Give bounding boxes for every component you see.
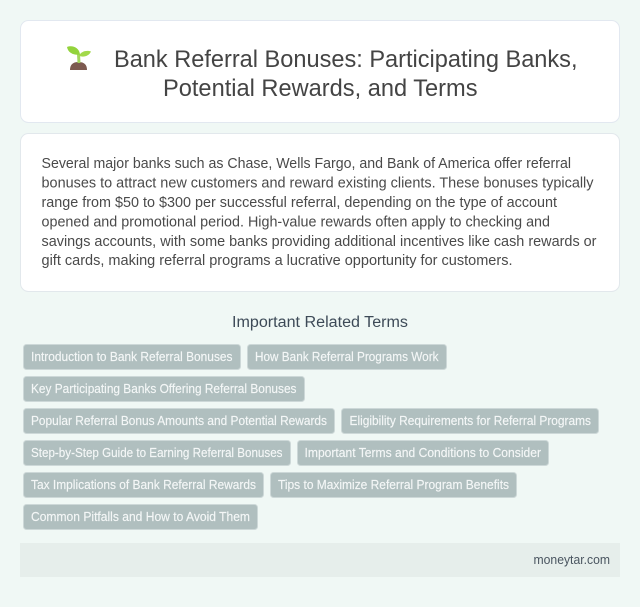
summary text: bonuses to attract new customers and reward existing clients. These bonuses typically xyxy=(42,176,594,192)
summary text: savings accounts, with some banks providing additional incentives like cash rewards or xyxy=(42,234,597,250)
panel: title card xyxy=(20,20,620,122)
tag: How Bank Referral Programs Work xyxy=(255,350,439,364)
tag: Step-by-Step Guide to Earning Referral Bonuses xyxy=(31,446,282,460)
summary text: Several major banks such as Chase, Wells Fargo, and Bank of America offer referral xyxy=(42,156,571,172)
summary text: gift cards, making referral programs a lucrative opportunity for customers. xyxy=(42,253,512,269)
title: Bank Referral Bonuses: Participating Banks, xyxy=(114,46,578,73)
tag xyxy=(24,408,334,434)
tag xyxy=(298,440,548,466)
summary text: opened and promotional period. High-value rewards often apply to checking and xyxy=(42,214,550,230)
tag xyxy=(248,344,446,370)
title: Potential Rewards, and Terms xyxy=(163,75,478,102)
tag: Eligibility Requirements for Referral Programs xyxy=(350,414,591,428)
tag: Introduction to Bank Referral Bonuses xyxy=(31,350,232,364)
tag xyxy=(342,408,598,434)
tag xyxy=(24,440,290,466)
tag xyxy=(24,344,240,370)
tag xyxy=(24,504,258,530)
summary text: range from $50 to $300 per successful referral, depending on the type of account xyxy=(42,195,557,211)
panel: summary card xyxy=(20,134,620,292)
tag xyxy=(24,376,304,402)
summary text xyxy=(42,156,597,269)
tag: Important Terms and Conditions to Consider xyxy=(304,446,541,460)
tag: Popular Referral Bonus Amounts and Potential Rewards xyxy=(31,414,327,428)
tag xyxy=(24,472,264,498)
tag xyxy=(270,472,516,498)
tag: Tax Implications of Bank Referral Rewards xyxy=(31,478,256,492)
title xyxy=(114,46,578,102)
tag: Tips to Maximize Referral Program Benefits xyxy=(278,478,509,492)
panel: related term tags xyxy=(24,344,598,530)
footer xyxy=(20,543,620,577)
icon: sprout xyxy=(67,46,91,70)
tag: Common Pitfalls and How to Avoid Them xyxy=(31,510,250,524)
tag: Key Participating Banks Offering Referral Bonuses xyxy=(31,382,296,396)
footer source text: moneytar.com xyxy=(534,553,610,567)
heading: important related terms: Important Related Terms xyxy=(232,314,408,331)
